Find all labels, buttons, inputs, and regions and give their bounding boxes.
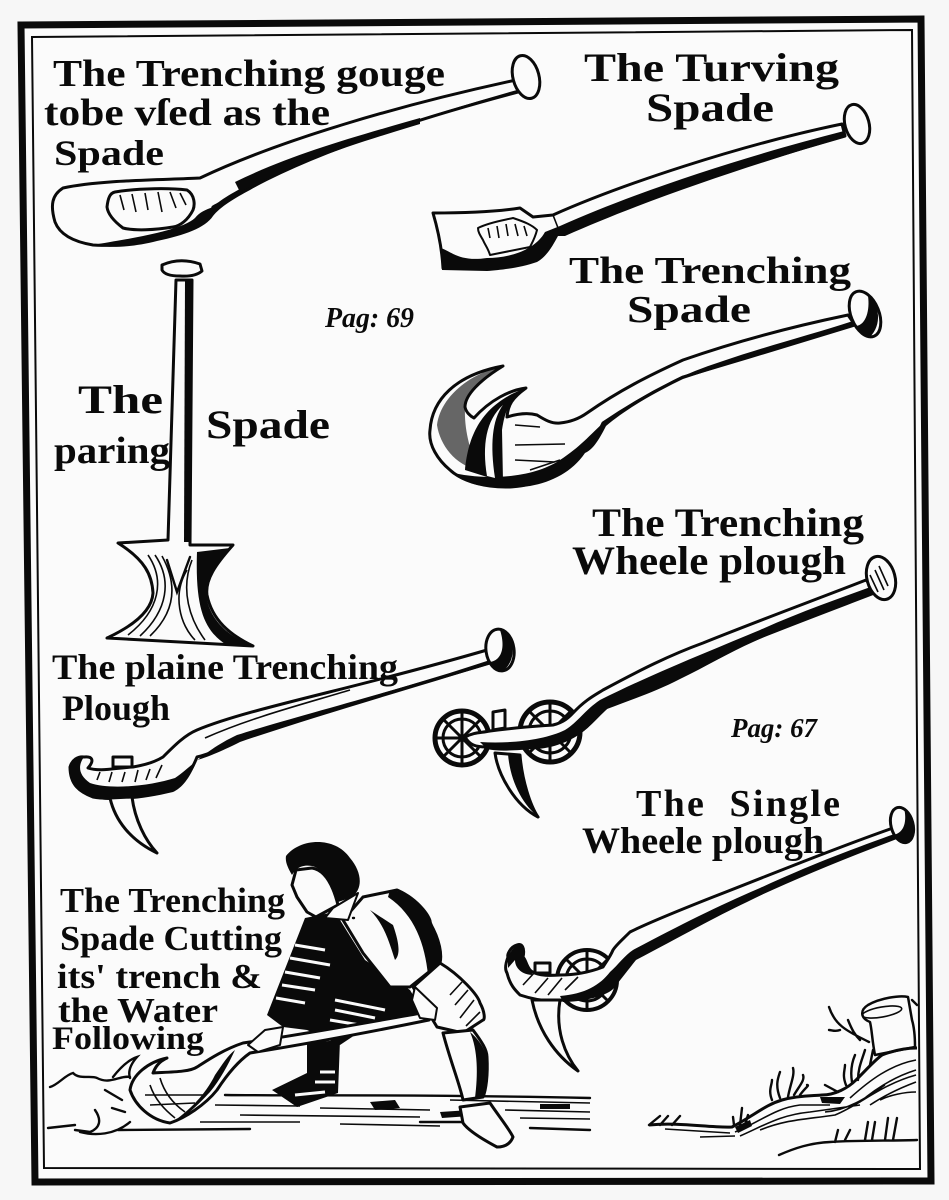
tool: trenching wheel plough — [435, 553, 900, 818]
label: its trench and: its' trench & — [57, 957, 262, 996]
label: Spade (paring): Spade — [206, 402, 330, 447]
label: Pag 67: Pag: 67 — [730, 713, 818, 743]
tool: trenching spade — [430, 287, 887, 488]
label: Spade Cutting: Spade Cutting — [60, 919, 283, 958]
label: to be used as the: tobe vſed as the — [44, 92, 330, 134]
label: the Water: the Water — [58, 991, 218, 1030]
label: Spade (trenching): Spade — [627, 289, 751, 331]
man's breeches — [413, 963, 484, 1033]
icon: plain plough knob — [483, 627, 517, 673]
label: Following: Following — [52, 1021, 205, 1057]
ground strip — [48, 1095, 590, 1130]
man's shoe — [460, 1103, 513, 1147]
label: The Single: The Single — [636, 783, 840, 825]
hillside — [649, 1048, 917, 1127]
label: The Trenching (man): The Trenching — [60, 881, 286, 920]
label: Wheele plough: Wheele plough — [572, 538, 846, 583]
tree stump — [829, 996, 917, 1055]
man's torso and arm — [267, 912, 425, 1045]
icon: gouge knob — [508, 52, 544, 102]
icon: single plough knob — [887, 805, 917, 845]
icon: rear wheel — [520, 702, 580, 762]
label: paring: paring — [54, 430, 170, 472]
label: Spade (turving): Spade — [646, 85, 774, 130]
tool: single wheel plough — [506, 805, 917, 1071]
label: The Trenching gouge: The Trenching gouge — [53, 53, 445, 95]
label: The Turving: The Turving — [584, 45, 839, 90]
man's head — [286, 842, 360, 920]
label: Wheele plough (single): Wheele plough — [582, 821, 824, 862]
icon: paring knob — [162, 261, 202, 276]
label: Plough: Plough — [62, 688, 170, 728]
icon: front wheel — [435, 711, 489, 765]
label: The: The — [78, 377, 163, 422]
illustration: man digging a trench — [48, 842, 590, 1147]
tool: turving spade — [433, 102, 874, 271]
man's far leg — [272, 1040, 340, 1107]
label: The Trenching (spade): The Trenching — [569, 250, 851, 292]
label: The Trenching (wheel): The Trenching — [592, 500, 864, 545]
icon: plough wheel — [557, 950, 617, 1010]
trenching spade in the man's hands — [113, 1012, 429, 1124]
label: page reference 69: Pag: 69 — [324, 303, 414, 334]
tool: trenching gouge — [52, 52, 544, 247]
man's jacket — [343, 890, 441, 987]
man's near leg — [443, 1030, 487, 1100]
illustration: landscape with tree stump — [649, 996, 917, 1155]
man's hands — [248, 987, 437, 1052]
hillside hatching and grass — [649, 1050, 917, 1155]
earth clod — [50, 1073, 130, 1134]
icon: turving knob — [840, 102, 874, 146]
label: The plaine Trenching: The plaine Trenching — [52, 647, 398, 687]
icon: trenching spade knob — [843, 287, 887, 341]
tool: paring spade — [107, 261, 253, 646]
label: Spade: Spade — [54, 133, 164, 173]
icon: wheel plough knob — [862, 553, 900, 603]
tool: plain trenching plough — [70, 627, 517, 853]
